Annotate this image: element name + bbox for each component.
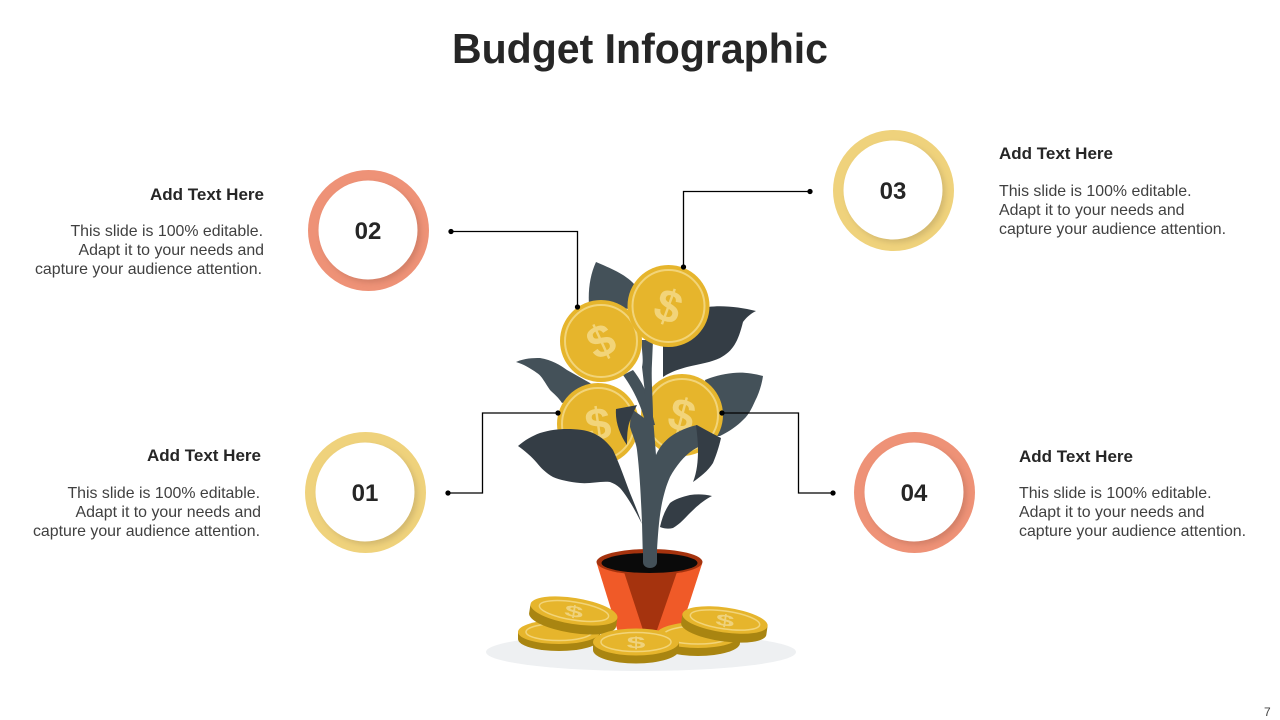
pile coin: right back: [656, 622, 740, 656]
badge 04: 04: [901, 480, 928, 507]
badge 02: [308, 170, 429, 291]
text block 03: Adapt it to your needs and: [999, 202, 1185, 219]
text block 04: Add Text Here: [1019, 447, 1133, 466]
coin: upper left: [560, 300, 642, 382]
text block 03: capture your audience attention.: [999, 221, 1226, 238]
text block 02: This slide is 100% editable.: [70, 223, 263, 240]
leaf: upper right: [663, 306, 756, 377]
leaf: folded right: [693, 425, 721, 482]
coin: lower left: $: [582, 396, 614, 452]
text block 01: capture your audience attention.: [33, 523, 260, 540]
ground shadow: [486, 633, 796, 671]
text block 01: Add Text Here: [147, 446, 261, 465]
pile coin: tilted left: $: [563, 601, 585, 622]
leaf: folded left: [616, 405, 637, 445]
leaf: middle right: [705, 373, 763, 436]
badge 04: [854, 432, 975, 553]
coin: lower right: $: [663, 387, 701, 443]
badge 01: [305, 432, 426, 553]
text block 04: capture your audience attention.: [1019, 523, 1246, 540]
leaf: big left: [518, 429, 642, 524]
text block 04: Adapt it to your needs and: [1019, 504, 1205, 521]
page number: 7: [1264, 705, 1271, 719]
text block 03: This slide is 100% editable.: [999, 183, 1192, 200]
flower pot: [596, 545, 702, 632]
connector 03: [682, 190, 812, 269]
stems: [623, 370, 655, 425]
text block 01: [33, 446, 261, 540]
badge 02: 02: [355, 218, 381, 245]
connector 04: [720, 411, 835, 495]
coin: upper left: $: [578, 312, 624, 370]
text block 01: This slide is 100% editable.: [67, 485, 260, 502]
title: Budget Infographic: [452, 25, 828, 72]
connector 02: [449, 230, 580, 309]
pile coin: tilted left: [527, 591, 619, 640]
badge 03: [833, 130, 954, 251]
text block 02: Add Text Here: [150, 185, 264, 204]
text block 02: Adapt it to your needs and: [78, 242, 264, 259]
plant illustration: [516, 262, 763, 568]
pile coin: left back: [518, 620, 600, 651]
pile coin: tilted right: $: [714, 610, 736, 631]
leaf: middle left: [516, 358, 598, 403]
pile coin: tilted right: [679, 602, 769, 647]
pile coin: centre: [593, 628, 679, 664]
leaf: small lower right: [660, 494, 712, 529]
connector 01: [446, 411, 560, 495]
text block 03: [999, 144, 1226, 238]
badge 01: 01: [352, 480, 378, 507]
badge 03: 03: [880, 178, 906, 205]
text block 03: Add Text Here: [999, 144, 1113, 163]
pile coin: centre: $: [627, 633, 646, 652]
coin: upper right: [628, 265, 710, 347]
leaf: top: [589, 262, 640, 310]
text block 02: [35, 185, 264, 278]
coin pile: [518, 591, 769, 664]
text block 01: Adapt it to your needs and: [75, 504, 261, 521]
coin: lower left: [557, 383, 639, 465]
text block 02: capture your audience attention.: [35, 261, 262, 278]
text block 04: This slide is 100% editable.: [1019, 485, 1212, 502]
coin: upper right: $: [648, 277, 689, 335]
text block 04: [1019, 447, 1246, 540]
coin: lower right: [641, 374, 723, 456]
